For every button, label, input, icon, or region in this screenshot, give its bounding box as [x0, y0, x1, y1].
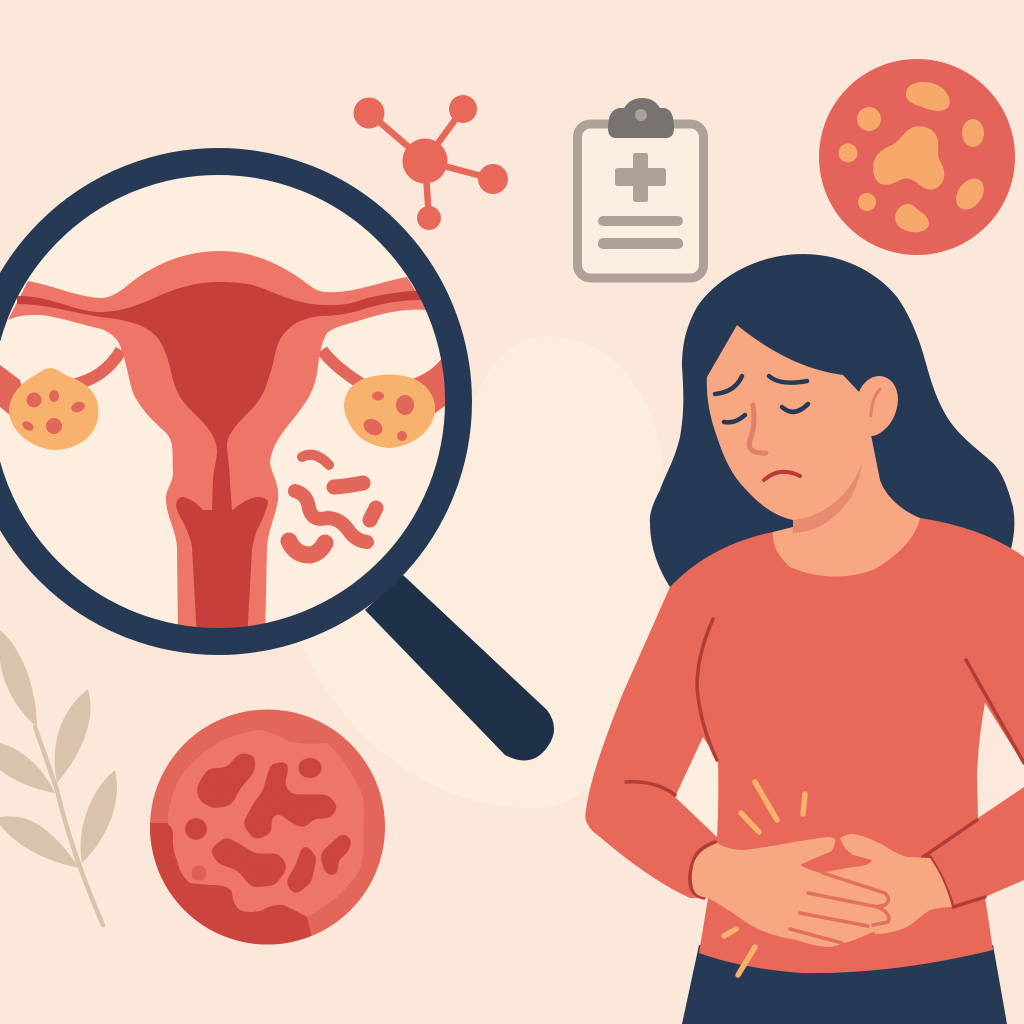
left ovary [9, 368, 98, 450]
uterine cavity and tubes [17, 282, 425, 510]
icon: tissue cell top right [819, 59, 1015, 255]
pain marks [724, 782, 805, 975]
ovarian ligaments [0, 350, 446, 417]
magnifier handle [365, 575, 554, 760]
lens interior [0, 172, 448, 630]
icon: plant sprig [0, 630, 117, 925]
right arm gap [977, 703, 1024, 818]
trousers [682, 945, 1007, 1024]
hands [692, 834, 952, 947]
icon: clipboard [578, 98, 704, 278]
right ovary [344, 374, 435, 448]
small lesion [192, 866, 206, 880]
icon: molecule [354, 95, 508, 230]
nose [749, 405, 766, 453]
magnifier ring [0, 162, 458, 642]
mouth [764, 472, 800, 480]
neck [773, 430, 920, 576]
ear [859, 376, 898, 436]
uterus outer wall [8, 251, 427, 640]
sweater fold lines [626, 619, 1024, 907]
uterus diagram [0, 251, 446, 640]
cervix and vagina [176, 497, 268, 640]
hair [650, 254, 1014, 590]
sweater [585, 518, 1024, 973]
icon: endometrial tissue circle [150, 710, 385, 944]
left arm gap [675, 737, 718, 837]
illustration: magnifying glass [0, 162, 554, 760]
chin shadow [793, 463, 862, 533]
endometrial lesions [289, 455, 376, 555]
eyebrows and eyes [715, 376, 808, 422]
illustration: woman [585, 254, 1024, 1024]
face [707, 325, 870, 520]
